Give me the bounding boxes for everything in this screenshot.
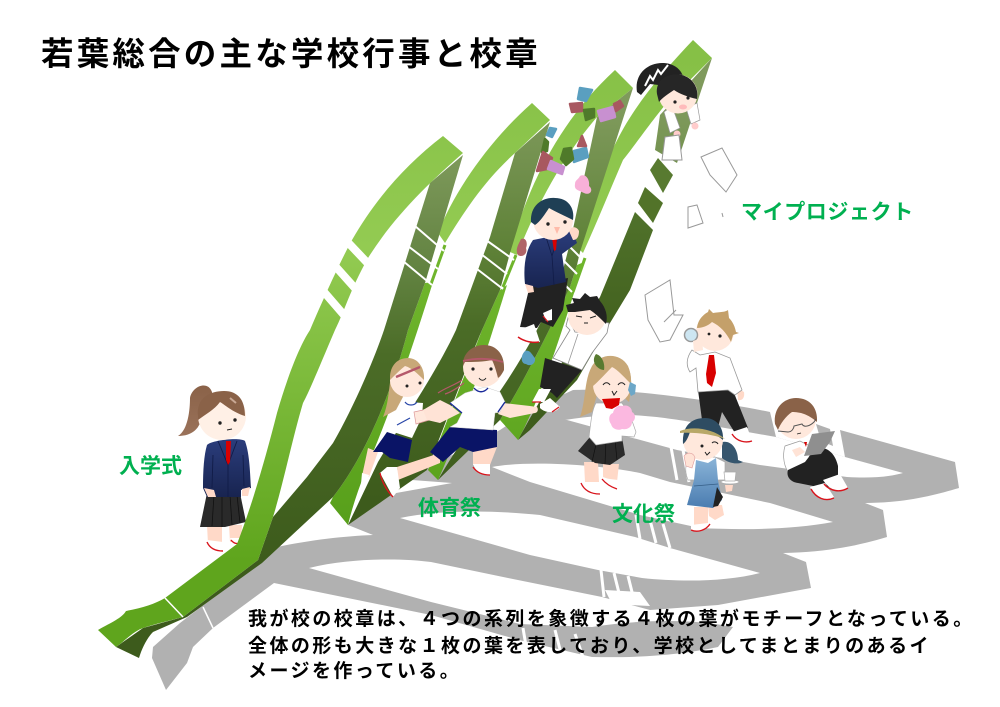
- label: my project: マイプロジェクト: [741, 201, 914, 224]
- character: girl with pink flower: [578, 354, 636, 494]
- character: boy with magnifying glass: [684, 309, 752, 442]
- leaf 3 green: [428, 70, 633, 480]
- character: boy in blazer climbing: [518, 198, 579, 342]
- character: runner boy with headband: [380, 345, 538, 497]
- climbing holds on the leaves: [517, 88, 623, 365]
- description text: 全体の形も大きな１枚の葉を表しており、学校としてまとまりのあるイ: [248, 634, 931, 657]
- character: girl in blue apron with cup: [680, 418, 743, 531]
- paper sheets falling: [645, 148, 737, 342]
- leaf 1 green: [98, 136, 463, 658]
- label: culture festival: 文化祭: [612, 503, 675, 526]
- description text: メージを作っている。: [248, 660, 461, 682]
- description text: [248, 607, 975, 682]
- leaf 4 green: [500, 40, 712, 440]
- gray leaf emblem shadow: [152, 390, 959, 690]
- leaf 2 green: [330, 103, 550, 525]
- character: entrance ceremony girl in blazer: [178, 385, 251, 551]
- description text: 我が校の校章は、４つの系列を象徴する４枚の葉がモチーフとなっている。: [248, 607, 975, 630]
- character: boy lounging with hands behind head: [532, 293, 609, 412]
- label: entrance ceremony: 入学式: [119, 455, 182, 478]
- label: sports festival: 体育祭: [418, 497, 481, 520]
- title: 若葉総合の主な学校行事と校章: [41, 36, 541, 72]
- character: runner girl with blonde hair: [361, 358, 439, 484]
- character: boy with glasses and tablet: [775, 398, 848, 500]
- character: girl hanging from top with papers: [637, 63, 700, 160]
